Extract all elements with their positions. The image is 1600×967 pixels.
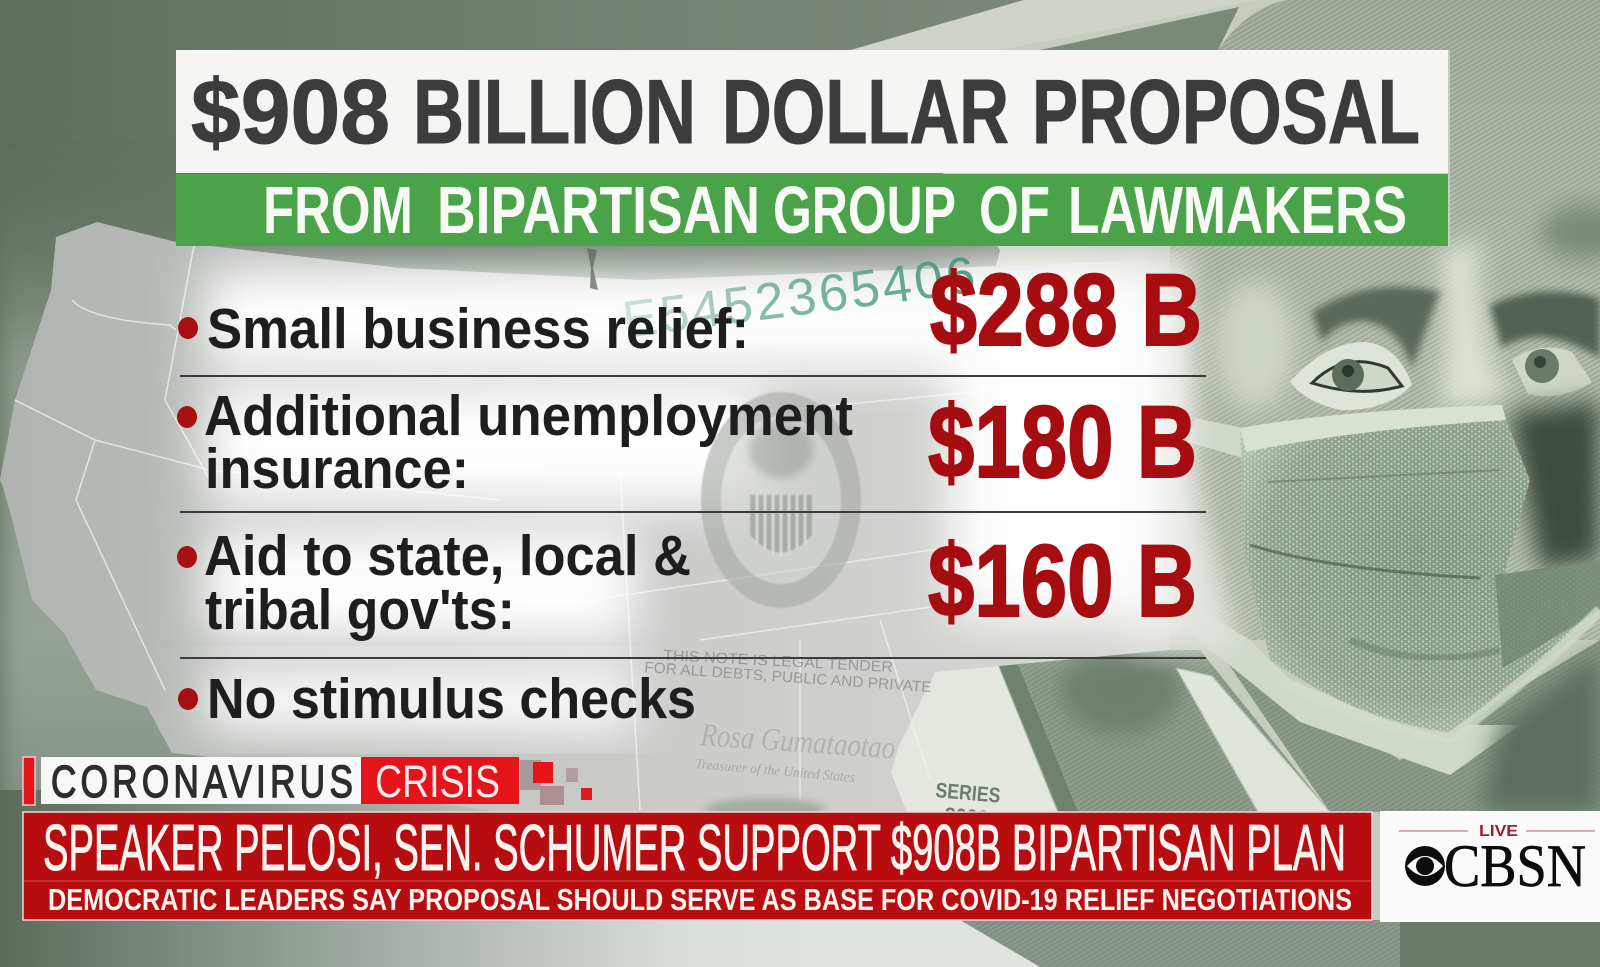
bullet: [177, 546, 197, 568]
label: Additional unemployment: [204, 384, 853, 448]
face shadow on the right: [1510, 400, 1600, 570]
CBSN wordmark: CBSN: [1444, 833, 1586, 899]
ear loops: [1188, 418, 1520, 775]
dollar bill with Franklin portrait: [800, 0, 1600, 967]
engraved strip at top of bill: [1040, 7, 1239, 50]
bullet: [178, 317, 198, 339]
right eyebrow: [1490, 291, 1600, 358]
amount: $288 B: [930, 253, 1202, 367]
series label on bill: SERIES: [935, 779, 1001, 808]
signature on bill: Rosa Gumataotao: [699, 716, 897, 766]
sub-headline: DEMOCRATIC LEADERS SAY PROPOSAL SHOULD SERVE AS BASE FOR COVID-19 RELIEF NEGOTIATIONS: [48, 883, 1352, 917]
serial number: E5452365406: [619, 246, 979, 350]
amount: $160 B: [928, 524, 1197, 638]
subtitle: OF: [979, 173, 1050, 248]
title: DOLLAR: [722, 62, 1009, 163]
coronavirus crisis tag: [23, 756, 592, 807]
amount: $180 B: [928, 385, 1197, 499]
white label: [41, 757, 361, 804]
dark patch of bill above the banner: [705, 798, 825, 822]
coat and beard area: [990, 645, 1330, 812]
label: insurance:: [205, 437, 469, 501]
title: PROPOSAL: [1032, 62, 1420, 163]
icon: CBS eye: [1405, 846, 1445, 886]
series label on bill: [935, 779, 1001, 830]
label: Aid to state, local &: [204, 524, 691, 588]
Federal Reserve seal: [701, 392, 861, 608]
soft fade between list and portrait: [1125, 255, 1240, 650]
row: additional unemployment insurance: [177, 384, 1197, 501]
title: [191, 62, 1420, 163]
bill top paper fold: [851, 0, 1259, 50]
CBSN live logo box: [1380, 811, 1600, 922]
label: tribal gov'ts:: [205, 578, 515, 642]
map of the United States: [0, 222, 1170, 822]
bullet: [178, 688, 198, 710]
row: no stimulus checks: [178, 667, 696, 731]
decorative squares: [520, 760, 592, 805]
soft white glow behind list: [205, 270, 1170, 730]
row: aid to state, local and tribal governments: [177, 524, 1197, 642]
legal tender text on bill: THIS NOTE IS LEGAL TENDER: [663, 647, 894, 676]
neck and chin engraving: [1212, 640, 1600, 812]
subtitle: LAWMAKERS: [1068, 173, 1407, 248]
red accent bar: [23, 757, 35, 805]
treasury seal remnant under banner: [587, 248, 598, 290]
title: $908: [191, 62, 390, 163]
lower right portrait shadow: [1480, 650, 1600, 812]
label: No stimulus checks: [207, 667, 696, 731]
title: BILLION: [413, 62, 696, 163]
hair and forehead engraving: [1170, 0, 1600, 640]
right eye: [1512, 348, 1592, 396]
surgical mask: [1188, 405, 1600, 775]
face highlights: [1215, 240, 1510, 410]
treasurer caption on bill: Treasurer of the United States: [695, 757, 856, 786]
bill lower strip: [800, 920, 1600, 967]
subtitle: GROUP: [773, 173, 956, 248]
state borders: [15, 240, 1100, 810]
subtitle: FROM: [263, 173, 413, 248]
bullet: [177, 406, 197, 428]
crisis text: CRISIS: [375, 756, 500, 807]
title panel: [176, 50, 1448, 173]
red label: [361, 757, 519, 804]
left eyebrow: [1312, 287, 1440, 368]
left eye: [1290, 342, 1412, 410]
subtitle banner: [176, 173, 1448, 248]
subtitle: BIPARTISAN: [437, 173, 760, 248]
series label on bill: 2003: [944, 804, 989, 830]
label: Small business relief:: [207, 297, 749, 361]
legal tender text on bill: FOR ALL DEBTS, PUBLIC AND PRIVATE: [644, 659, 932, 696]
row: small business relief: [178, 253, 1202, 367]
bill paper: [800, 0, 1600, 967]
lower third headline banner: [23, 811, 1372, 920]
coronavirus text: CORONAVIRUS: [51, 756, 353, 807]
bill white margin near Florida: [890, 650, 1058, 812]
subtitle: [263, 173, 1407, 248]
collar band: [1176, 668, 1330, 812]
live label: LIVE: [1479, 823, 1518, 840]
